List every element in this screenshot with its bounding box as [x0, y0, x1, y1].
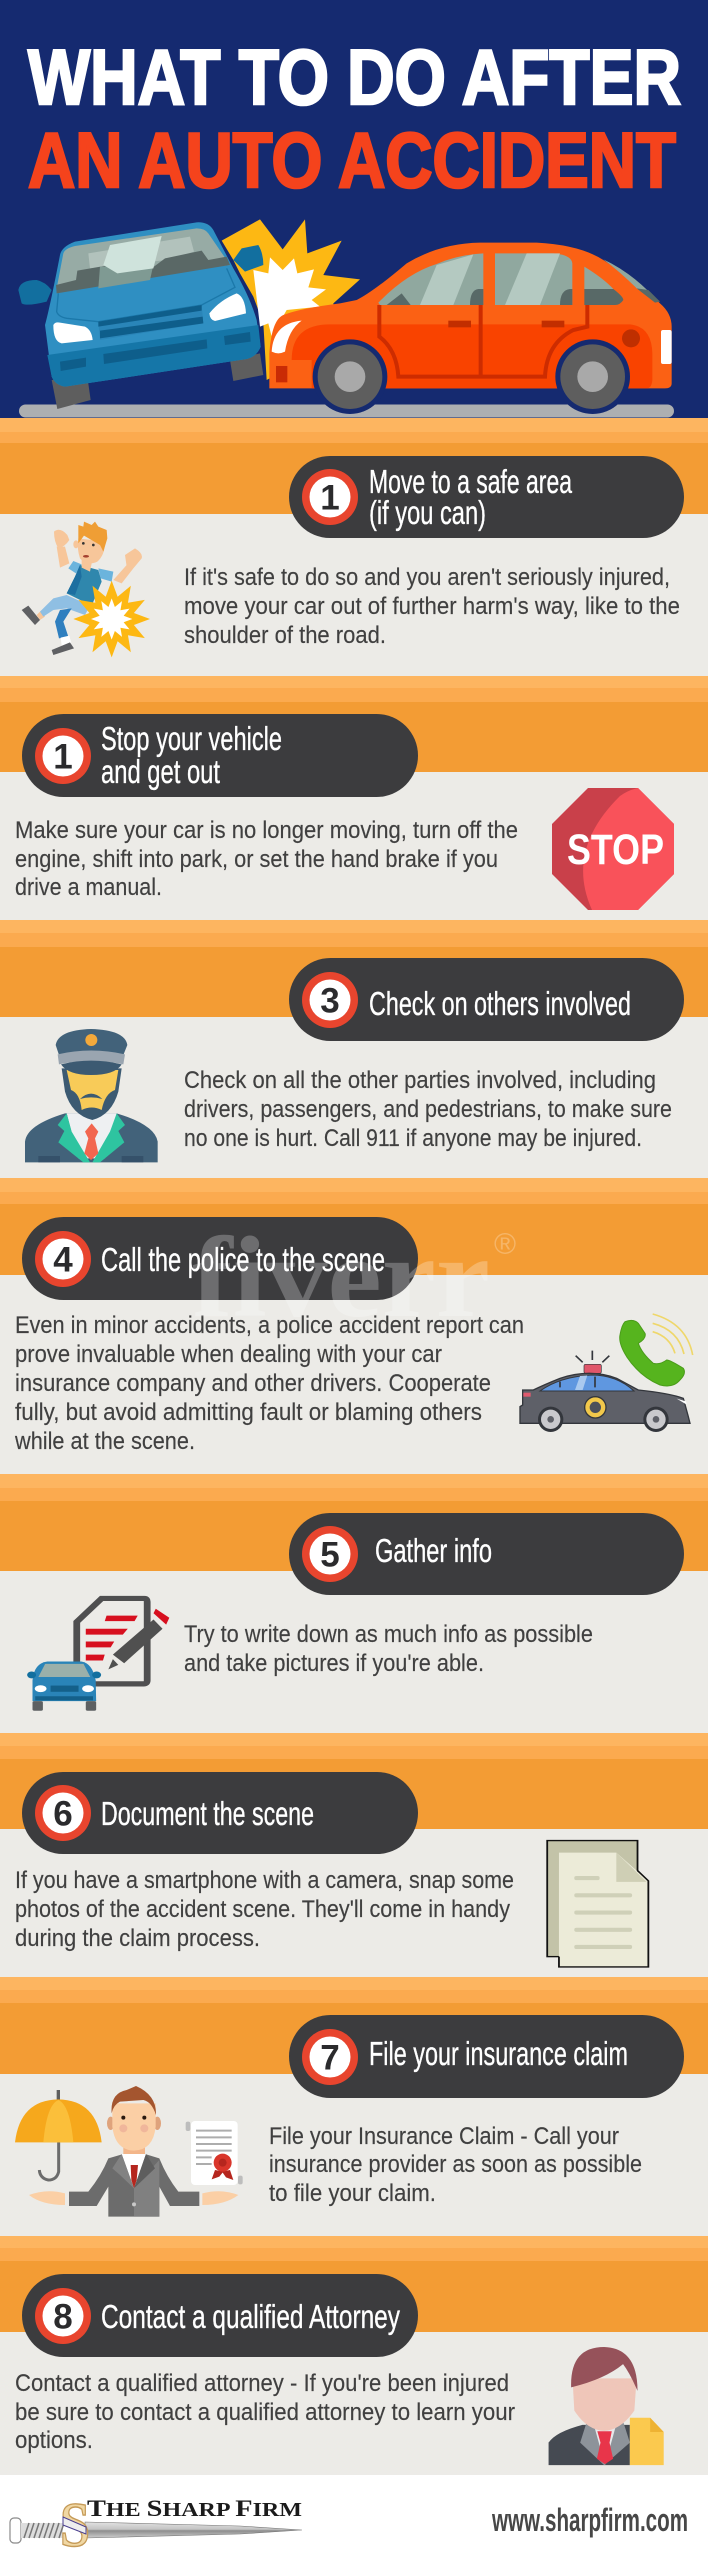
step 7 text: [269, 2123, 642, 2207]
step 8 text: options.: [15, 2427, 93, 2454]
step 7 text: insurance provider as soon as possible: [269, 2151, 642, 2178]
step 7 text: File your Insurance Claim - Call your: [269, 2123, 619, 2150]
step 4 text: [14, 1312, 524, 1455]
footer logo: The Sharp Firm: THE SHARP FIRM: [87, 2496, 302, 2521]
step 2 heading: stop your vehicle: and get out: [101, 753, 220, 790]
icon: falling person: [22, 522, 150, 657]
sword: [10, 2518, 302, 2543]
step 8 text: Contact a qualified attorney - If you're been injured: [15, 2370, 509, 2397]
step 8 heading: contact attorney: 8: [53, 2298, 73, 2336]
step 3 heading: check on others: [289, 958, 684, 1041]
step 5 text: Try to write down as much info as possible: [184, 1621, 593, 1648]
step 4 text: while at the scene.: [14, 1428, 195, 1455]
step 1 text: shoulder of the road.: [184, 622, 386, 649]
title: [28, 33, 681, 204]
step 5 text: and take pictures if you're able.: [184, 1650, 484, 1677]
step 3 heading: check on others: 3: [320, 982, 340, 1020]
step 6 text: photos of the accident scene. They'll come in handy: [15, 1896, 510, 1923]
icon: attorney with folder: [549, 2347, 664, 2465]
step 4 text: Even in minor accidents, a police accident report can: [15, 1312, 524, 1339]
step 6 heading: document the scene: [22, 1772, 418, 1854]
step 1 text: move your car out of further harm's way, like to the: [184, 593, 680, 620]
step 1 text: [184, 564, 680, 649]
step 2 heading: stop your vehicle: Stop your vehicle: [101, 720, 282, 757]
step 2 text: [15, 817, 518, 901]
step 6 heading: document the scene: Document the scene: [101, 1795, 314, 1832]
step 7 text: to file your claim.: [269, 2180, 436, 2207]
icon: stop sign: STOP: [567, 826, 664, 874]
step 8 text: be sure to contact a qualified attorney to learn your: [15, 2399, 515, 2426]
step 8 heading: contact attorney: [22, 2274, 418, 2357]
step 2 heading: stop your vehicle: [22, 714, 418, 797]
icon: police officer: [25, 1029, 158, 1162]
step 8 text: [15, 2370, 515, 2454]
footer logo: The Sharp Firm: [10, 2489, 302, 2560]
step 1 heading: move to a safe area: 1: [320, 478, 340, 518]
step 6 text: [15, 1867, 514, 1952]
step 3 text: no one is hurt. Call 911 if anyone may be injured.: [184, 1125, 642, 1152]
step 5 heading: gather info: 5: [320, 1536, 340, 1574]
icon: document, pencil and car: [27, 1598, 169, 1711]
step 1 heading: move to a safe area: [289, 456, 684, 538]
step 6 text: during the claim process.: [15, 1925, 260, 1952]
fiverr watermark: fiverr: [192, 1214, 490, 1341]
step 2 text: engine, shift into park, or set the hand brake if you: [15, 846, 498, 873]
explosion: [222, 219, 360, 380]
step 4 heading: call the police: Call the police to the scene: [101, 1241, 385, 1278]
step 4 heading: call the police: 4: [53, 1240, 73, 1280]
step 7 heading: file insurance claim: [289, 2015, 684, 2098]
step 1 heading: move to a safe area: Move to a safe area: [369, 463, 572, 500]
step 5 heading: gather info: Gather info: [375, 1532, 492, 1569]
step 1 text: If it's safe to do so and you aren't seriously injured,: [184, 564, 670, 591]
step 4 text: fully, but avoid admitting fault or blaming others: [15, 1399, 482, 1426]
step 3 text: Check on all the other parties involved, including: [184, 1067, 656, 1094]
road foreground edge: [0, 418, 708, 432]
step 4 heading: call the police: [22, 1217, 418, 1300]
fiverr watermark: ®: [494, 1228, 516, 1261]
blue car: [18, 222, 263, 409]
step 2 text: drive a manual.: [15, 874, 162, 901]
step 8 heading: contact attorney: Contact a qualified Attorney: [101, 2298, 400, 2335]
footer logo: The Sharp Firm: S: [60, 2489, 90, 2560]
step 6 heading: document the scene: 6: [53, 1794, 73, 1834]
step 6 text: If you have a smartphone with a camera, snap some: [15, 1867, 514, 1894]
step 1 heading: move to a safe area: (if you can): [369, 494, 486, 531]
red car: [269, 243, 672, 414]
icon: stop sign: [552, 788, 674, 910]
step 5 heading: gather info: [289, 1513, 684, 1595]
step 5 text: [184, 1621, 593, 1677]
step 3 text: [184, 1067, 672, 1152]
icon: police car and phone: [520, 1314, 693, 1432]
road: [19, 404, 674, 418]
step 2 heading: stop your vehicle: 1: [53, 738, 73, 776]
step 4 text: prove invaluable when dealing with your car: [15, 1341, 442, 1368]
step 2 text: Make sure your car is no longer moving, turn off the: [15, 817, 518, 844]
step 7 heading: file insurance claim: 7: [320, 2038, 340, 2078]
icon: paper documents: [547, 1841, 648, 1967]
step 4 text: insurance company and other drivers. Cooperate: [15, 1370, 491, 1397]
icon: insurance agent with umbrella and certificate: [15, 2086, 243, 2217]
